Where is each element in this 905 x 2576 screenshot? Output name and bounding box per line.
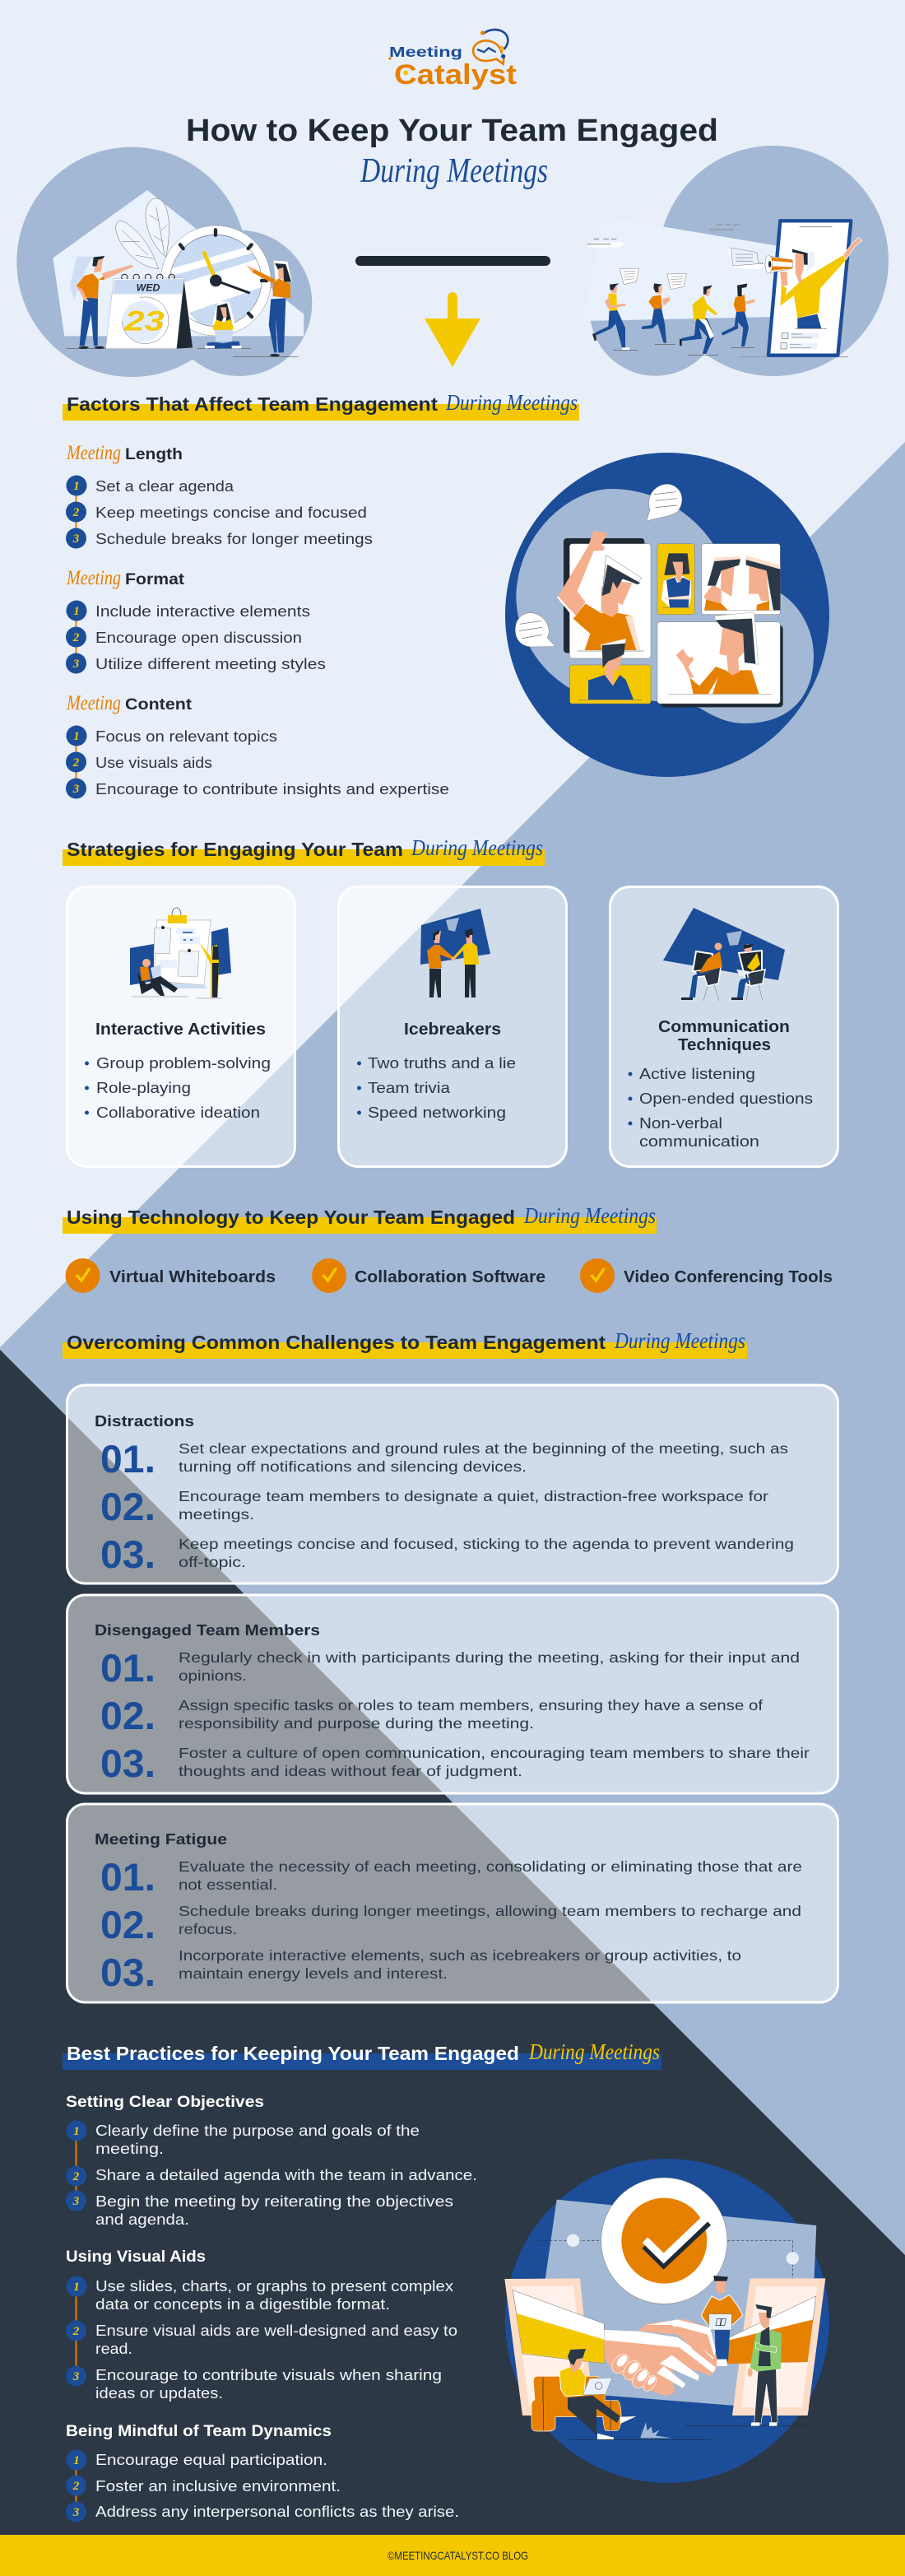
text block: meeting length: 3 [72,532,80,546]
text block: setting clear objectives: 1 [73,2125,80,2138]
text block: being mindful of team dynamics: 1 [73,2454,80,2467]
panel: meeting fatigue: 01. [100,1855,155,1899]
divider bar [355,256,550,266]
panel: interactive activities: Collaborative ideation [96,1104,260,1121]
panel: communication techniques: communication [639,1132,759,1150]
panel: disengaged team members: Assign specific tasks or roles to team members, ensuring they have a sense of [179,1697,763,1713]
panel: meeting fatigue: 03. [100,1951,155,1994]
text block: meeting content: 2 [72,756,80,770]
text block: meeting length: 1 [73,480,80,493]
panel: disengaged team members: opinions. [179,1667,247,1684]
text block: setting clear objectives: Setting Clear Objectives [66,2093,264,2111]
text block: meeting length [66,442,373,548]
text block: setting clear objectives: 2 [72,2170,80,2183]
text block: meeting length: Set a clear agenda [95,477,234,495]
text block: meeting length: Keep meetings concise and focused [95,504,367,521]
panel: distractions: turning off notifications and silencing devices. [179,1458,527,1475]
text block: meeting length: 2 [72,506,80,519]
text block: using visual aids: Encourage to contribute visuals when sharing [95,2366,442,2383]
panel: communication techniques: Non-verbal [639,1114,722,1132]
illustration: handshake and checkmark [504,2159,829,2483]
text block: using visual aids: 2 [72,2325,80,2338]
checklist: technology tools [66,1258,833,1293]
icon: handshake figures [420,909,490,997]
panel: meeting fatigue: maintain energy levels and interest. [179,1965,448,1982]
title: How to Keep Your Team Engaged [186,114,718,148]
illustration: megaphone and runners [582,146,889,376]
section heading: factors [63,390,579,421]
panel: icebreakers: Team trivia [368,1079,451,1096]
illustration: video call grid [505,453,829,777]
icon: board with notes [130,908,231,998]
footer credit: ©MEETINGCATALYST.CO BLOG [388,2549,528,2562]
text block: using visual aids: Use slides, charts, or graphs to present complex [95,2277,454,2295]
panel: meeting fatigue: Evaluate the necessity of each meeting, consolidating or eliminating those that are [179,1858,802,1875]
text block: meeting format: Meeting [66,567,121,589]
text block: meeting content: 1 [73,730,80,743]
panel: disengaged team members: 02. [100,1694,155,1737]
card title [658,1018,790,1054]
text block: using visual aids: 1 [73,2281,80,2294]
checklist: technology tools: Collaboration Software [355,1268,545,1286]
text block: being mindful of team dynamics: Being Mindful of Team Dynamics [66,2422,332,2440]
section heading: strategies [63,835,545,866]
panel: distractions: 02. [100,1485,155,1528]
panel: disengaged team members: 03. [100,1741,155,1785]
panel: meeting fatigue: 02. [100,1903,155,1946]
panel: interactive activities: Group problem-solving [96,1054,271,1072]
section heading: challenges: Overcoming Common Challenges to Team Engagement [67,1332,606,1353]
text block: meeting content: Focus on relevant topics [95,728,277,745]
text block: meeting format: Format [125,570,185,588]
text block: using visual aids: Ensure visual aids are well-designed and easy to [95,2322,457,2339]
section heading: strategies: During Meetings [411,835,543,860]
logo: Meeting Catalyst: Catalyst [394,59,517,91]
icon: seated figures [663,908,785,1001]
card title: Interactive Activities [95,1021,266,1039]
section heading: best practices: Best Practices for Keeping Your Team Engaged [67,2043,519,2064]
panel: meeting fatigue: Schedule breaks during longer meetings, allowing team members to recharge and [179,1903,801,1919]
panel: meeting fatigue: Incorporate interactive elements, such as icebreakers or group activities, to [179,1947,741,1964]
panel: meeting fatigue: Meeting Fatigue [95,1830,227,1848]
footer band [0,2535,905,2576]
text block: meeting format [66,567,326,673]
section heading: best practices: During Meetings [528,2039,660,2064]
text block: using visual aids: Using Visual Aids [66,2248,206,2266]
panel: communication techniques [610,887,838,1167]
text block: meeting content: Use visuals aids [95,754,212,771]
text block: meeting content: Content [125,695,193,714]
panel: disengaged team members: Foster a culture of open communication, encouraging team members to share their [179,1745,810,1761]
panel: disengaged team members: 01. [100,1646,155,1690]
panel: disengaged team members: Disengaged Team Members [95,1621,320,1639]
text block: setting clear objectives: Clearly define the purpose and goals of the [95,2122,420,2139]
panel: disengaged team members: thoughts and ideas without fear of judgment. [179,1763,522,1779]
section heading: best practices [63,2039,661,2070]
text block: meeting format: 1 [73,605,80,618]
panel: interactive activities [67,887,295,1167]
panel: communication techniques: Open-ended questions [639,1090,813,1107]
illustration: calendar and clock [16,147,312,377]
text block: using visual aids [66,2248,457,2402]
text block: meeting format: Include interactive elements [95,602,310,620]
text block: setting clear objectives: Begin the meeting by reiterating the objectives [95,2192,453,2210]
text block: setting clear objectives [66,2093,477,2228]
panel: disengaged team members [67,1595,838,1793]
section heading: challenges: During Meetings [614,1328,745,1353]
panel: distractions: Set clear expectations and ground rules at the beginning of the meeting, such as [179,1440,788,1457]
text block: setting clear objectives: meeting. [95,2140,164,2157]
illustration: calendar and clock: WED [137,281,160,293]
panel: meeting fatigue: not essential. [179,1876,277,1893]
text block: being mindful of team dynamics: 3 [72,2506,80,2519]
text block: meeting format: Utilize different meeting styles [95,655,326,672]
panel: meeting fatigue: refocus. [179,1921,237,1937]
text block: meeting content: Encourage to contribute insights and expertise [95,780,449,797]
card title: Icebreakers [404,1021,501,1039]
section heading: factors: During Meetings [445,390,578,415]
section heading: factors: Factors That Affect Team Engagement [67,393,438,415]
section heading: technology: Using Technology to Keep Your Team Engaged [67,1207,515,1228]
section heading: challenges [63,1328,747,1359]
panel: distractions: off-topic. [179,1554,246,1570]
panel: interactive activities: Role-playing [96,1079,191,1096]
panel: communication techniques: Active listening [639,1065,755,1082]
panel: icebreakers: Two truths and a lie [368,1054,516,1072]
text block: meeting content: 3 [72,783,80,796]
text block: meeting format: Encourage open discussion [95,629,302,646]
text block: using visual aids: 3 [72,2370,80,2383]
card title: Techniques [678,1036,771,1054]
card title: Communication [658,1018,790,1036]
text block: meeting format: 3 [72,658,80,671]
text block: meeting length: Length [125,445,183,463]
text block: being mindful of team dynamics: Encourage equal participation. [95,2451,327,2468]
text block: meeting length: Schedule breaks for longer meetings [95,530,373,547]
text block: being mindful of team dynamics [66,2422,459,2522]
section heading: technology: During Meetings [523,1203,656,1228]
text block: using visual aids: read. [95,2340,132,2357]
text block: setting clear objectives: and agenda. [95,2211,189,2228]
checklist: technology tools: Video Conferencing Tools [624,1268,833,1286]
panel: distractions: meetings. [179,1506,254,1523]
panel: disengaged team members: responsibility and purpose during the meeting. [179,1715,534,1732]
illustration: calendar and clock: 23 [123,306,165,337]
panel: distractions: 01. [100,1437,155,1481]
text block: setting clear objectives: 3 [72,2195,80,2208]
panel: distractions [67,1385,838,1583]
logo: Meeting Catalyst: Meeting [389,44,462,60]
panel: icebreakers: Speed networking [368,1104,506,1121]
panel: distractions: Distractions [95,1412,194,1430]
text block: meeting format: 2 [72,631,80,644]
text block: being mindful of team dynamics: Address any interpersonal conflicts as they arise. [95,2503,459,2520]
text block: meeting length: Meeting [66,442,121,464]
text block: being mindful of team dynamics: Foster an inclusive environment. [95,2477,341,2495]
text block: setting clear objectives: Share a detailed agenda with the team in advance. [95,2166,477,2183]
checklist: technology tools: Virtual Whiteboards [109,1268,276,1286]
arrow: down [425,292,480,367]
panel: disengaged team members: Regularly check in with participants during the meeting, asking for their input and [179,1649,800,1666]
text block: being mindful of team dynamics: 2 [72,2480,80,2493]
text block: using visual aids: data or concepts in a digestible format. [95,2295,390,2313]
section heading: strategies: Strategies for Engaging Your Team [67,839,403,860]
text block: meeting content: Meeting [66,692,121,714]
text block: using visual aids: ideas or updates. [95,2384,223,2402]
section heading: technology [63,1203,657,1234]
subtitle: During Meetings [360,152,548,190]
panel: distractions: Encourage team members to designate a quiet, distraction-free workspace for [179,1488,768,1504]
panel: distractions: 03. [100,1532,155,1576]
logo: Meeting Catalyst [388,30,517,91]
text block: meeting content [66,692,449,798]
panel: icebreakers [339,887,566,1167]
panel: distractions: Keep meetings concise and focused, sticking to the agenda to prevent wandering [179,1536,794,1552]
panel: meeting fatigue [67,1804,838,2002]
